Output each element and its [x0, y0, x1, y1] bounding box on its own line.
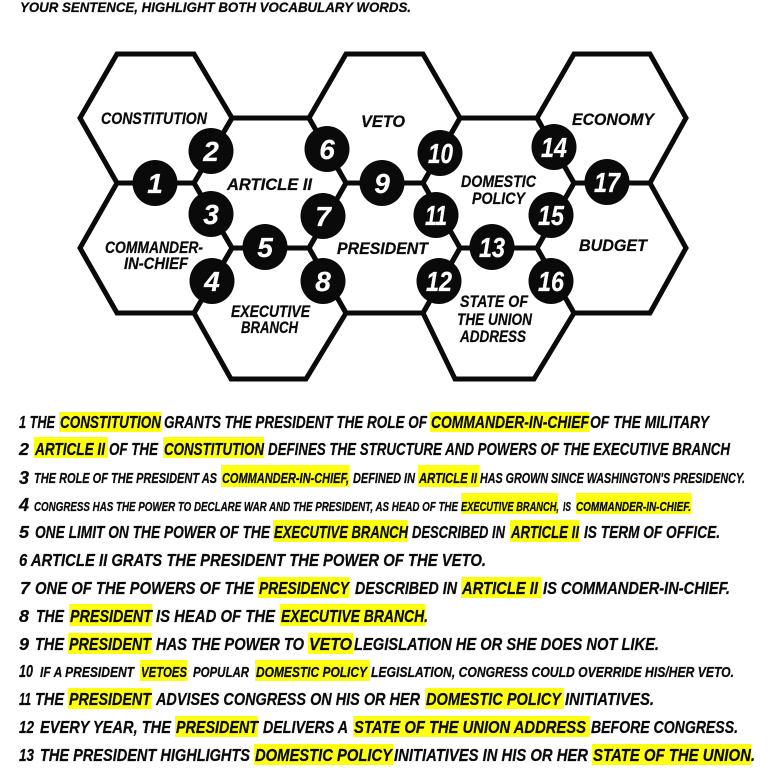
sentence 4: IS — [563, 500, 571, 514]
sentence 8: PRESIDENT — [70, 606, 153, 626]
sentence 10: IF A PRESIDENT — [40, 665, 135, 681]
sentence 7: ARTICLE II — [461, 578, 539, 598]
sentence 2: 2 — [18, 439, 29, 459]
sentence 11: DOMESTIC POLICY — [426, 689, 562, 709]
sentence 13: 13 — [19, 745, 34, 765]
sentence 9: THE — [35, 634, 65, 654]
sentence 4 — [18, 493, 691, 515]
sentence 5 — [19, 520, 720, 542]
sentence 11 — [19, 688, 654, 709]
sentence 10 — [19, 660, 734, 681]
sentence 12: DELIVERS A — [263, 717, 348, 737]
hexagon labels: BRANCH — [241, 318, 299, 337]
sentence 11: 11 — [19, 689, 31, 709]
sentence 13: INITIATIVES IN HIS OR HER — [394, 745, 588, 765]
sentence 6: 6 ARTICLE II GRATS THE PRESIDENT THE POWER OF THE VETO. — [19, 550, 486, 570]
hexagon labels: POLICY — [472, 189, 526, 208]
sentence 5: 5 — [19, 522, 29, 542]
sentence 7 — [20, 577, 730, 598]
sentence 13: DOMESTIC POLICY — [255, 745, 393, 765]
sentence 3: 3 — [19, 468, 29, 488]
sentence 2: CONSTITUTION — [164, 439, 264, 459]
sentence 3: ARTICLE II — [418, 471, 478, 487]
sentence 12: STATE OF THE UNION ADDRESS — [354, 717, 586, 737]
sentence 8: 8 — [19, 606, 29, 626]
hexagon labels: BUDGET — [579, 236, 649, 255]
circle numbers: 13 — [479, 232, 505, 263]
sentence 5: ONE LIMIT ON THE POWER OF THE — [35, 522, 271, 542]
sentence 3 — [19, 465, 745, 488]
sentence 5: ARTICLE II — [510, 522, 580, 542]
sentence 5: DESCRIBED IN — [412, 522, 505, 542]
hexagon labels: CONSTITUTION — [101, 109, 208, 128]
sentence 11: INITIATIVES. — [565, 689, 654, 709]
circle numbers: 5 — [257, 232, 273, 263]
sentence 3: THE ROLE OF THE PRESIDENT AS — [34, 471, 217, 487]
hexagon labels: VETO — [361, 112, 405, 131]
sentence 9 — [19, 633, 659, 654]
hexagon labels: DOMESTIC — [461, 172, 537, 191]
sentence 3: DEFINED IN — [353, 471, 415, 487]
sentence 4: 4 — [18, 495, 29, 515]
circle numbers: 16 — [538, 266, 564, 297]
hexagon labels: ARTICLE II — [226, 175, 313, 194]
sentence 2 — [18, 437, 730, 459]
hexagon labels: IN-CHIEF — [124, 254, 189, 273]
sentence 4: COMMANDER-IN-CHIEF. — [576, 500, 691, 514]
sentence 12: PRESIDENT — [176, 717, 259, 737]
circle numbers: 11 — [425, 200, 447, 231]
sentence 8: IS HEAD OF THE — [156, 606, 276, 626]
sentence 7: ONE OF THE POWERS OF THE — [35, 578, 255, 598]
circle numbers: 14 — [541, 132, 567, 163]
sentence 11: ADVISES CONGRESS ON HIS OR HER — [155, 689, 420, 709]
sentence 9: PRESIDENT — [69, 634, 152, 654]
circle numbers: 10 — [428, 138, 453, 169]
hexagon labels: COMMANDER- — [105, 238, 203, 257]
sentence 12 — [19, 716, 738, 737]
hexagon labels: ECONOMY — [572, 110, 656, 129]
sentence 8: THE — [36, 606, 65, 626]
sentence 4: CONGRESS HAS THE POWER TO DECLARE WAR AND THE PRESIDENT, AS HEAD OF THE — [34, 500, 459, 514]
sentence 10: DOMESTIC POLICY — [256, 665, 368, 681]
sentence 1 — [19, 412, 710, 432]
sentence 12: 12 — [19, 717, 34, 737]
sentence 7: DESCRIBED IN — [355, 578, 457, 598]
circle numbers: 8 — [315, 266, 331, 297]
sentence 1: 1 THE — [19, 412, 56, 432]
sentence 11: PRESIDENT — [69, 689, 152, 709]
sentence 8: EXECUTIVE BRANCH. — [281, 606, 428, 626]
sentence 10: POPULAR — [193, 665, 249, 681]
sentence 2: ARTICLE II — [34, 439, 106, 459]
sentence 10: VETOES — [141, 665, 187, 681]
sentence 13 — [19, 744, 755, 765]
sentence 9: HAS THE POWER TO — [156, 634, 304, 654]
sentence 5: IS TERM OF OFFICE. — [584, 522, 720, 542]
hexagon labels: PRESIDENT — [337, 239, 430, 258]
sentence 1: COMMANDER-IN-CHIEF — [431, 412, 590, 432]
hexagon labels: STATE OF — [460, 292, 529, 311]
sentence 13: THE PRESIDENT HIGHLIGHTS — [40, 745, 250, 765]
sentence 1: GRANTS THE PRESIDENT THE ROLE OF — [164, 412, 428, 432]
circle numbers: 3 — [203, 199, 219, 230]
sentence 11: THE — [35, 689, 65, 709]
circle numbers: 12 — [426, 266, 452, 297]
sentence 4: EXECUTIVE BRANCH, — [461, 500, 559, 514]
sentence 5: EXECUTIVE BRANCH — [274, 522, 408, 542]
sentence 8 — [19, 604, 428, 626]
hexagon labels: THE UNION — [457, 310, 533, 329]
circle numbers — [147, 132, 621, 297]
circle numbers: 4 — [203, 266, 220, 297]
sentence 7: 7 — [20, 578, 31, 598]
hexagon labels: EXECUTIVE — [231, 302, 311, 321]
circle numbers: 1 — [147, 168, 163, 199]
sentence 9: VETO — [309, 634, 352, 654]
sentence 9: 9 — [19, 634, 29, 654]
sentence 3: COMMANDER-IN-CHIEF, — [222, 471, 349, 487]
numbered circles — [132, 124, 630, 304]
sentence 10: 10 — [19, 661, 33, 681]
hexagon grid — [80, 54, 686, 379]
hexagon labels: ADDRESS — [459, 327, 527, 346]
hexagon labels — [101, 109, 656, 346]
sentence 1: OF THE MILITARY — [590, 412, 710, 432]
sentence 7: IS COMMANDER-IN-CHIEF. — [543, 578, 730, 598]
sentence 12: EVERY YEAR, THE — [40, 717, 172, 737]
sentence 2: OF THE — [109, 439, 159, 459]
circle numbers: 9 — [374, 168, 390, 199]
sentence 1: CONSTITUTION — [60, 412, 161, 432]
sentence 7: PRESIDENCY — [259, 578, 350, 598]
sentence 9: LEGISLATION HE OR SHE DOES NOT LIKE. — [354, 634, 659, 654]
circle numbers: 2 — [202, 136, 219, 167]
hexagon vocabulary diagram — [80, 54, 686, 379]
circle numbers: 6 — [319, 134, 335, 165]
circle numbers: 7 — [315, 201, 332, 232]
circle numbers: 17 — [594, 167, 621, 198]
circle numbers: 15 — [538, 200, 564, 231]
